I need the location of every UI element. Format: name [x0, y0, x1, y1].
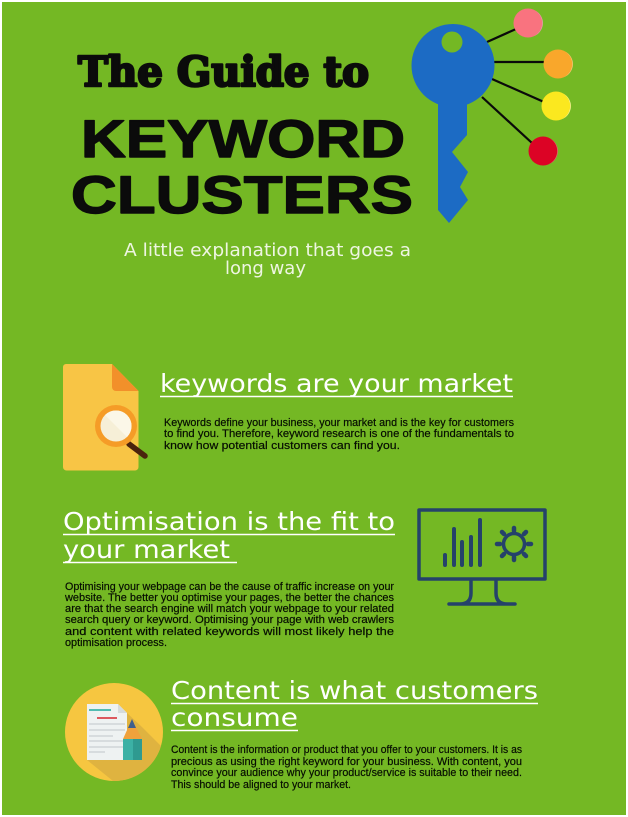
heading: Optimisation is the fit to	[63, 507, 395, 536]
body text: are that the search engine will match your webpage to your related	[65, 603, 394, 615]
body text: Content is the information or product that you offer to your customers. It is as	[171, 744, 522, 756]
panel: keywords are your market	[63, 364, 514, 470]
icon: monitor with chart and gear	[419, 510, 545, 604]
pin: pink	[514, 8, 543, 38]
body text: search query or keyword. Optimising your page with web crawlers	[65, 614, 394, 626]
body text: Keywords define your business, your market and is the key for customers	[164, 417, 514, 429]
body text: optimisation process.	[65, 637, 167, 649]
title line: KEYWORD: KEYWORD	[81, 110, 405, 169]
key hole	[442, 32, 462, 52]
subtitle: long way	[225, 259, 306, 279]
body text: know how potential customers can find you.	[164, 440, 400, 452]
body text: precious as using the right keyword for your business. With content, you	[171, 756, 522, 768]
pin: red	[528, 136, 558, 166]
heading	[63, 507, 395, 564]
body text: and content with related keywords will most likely help the	[65, 626, 394, 638]
pin: orange	[544, 50, 573, 78]
title line: CLUSTERS: CLUSTERS	[71, 166, 413, 225]
subtitle	[124, 241, 411, 279]
pin: yellow	[542, 92, 571, 120]
heading: your market	[63, 535, 230, 564]
body text	[171, 744, 522, 791]
icon: key with coloured pins	[412, 8, 573, 223]
body text	[64, 581, 394, 649]
body text: to find you. Therefore, keyword research is one of the fundamentals to	[164, 428, 514, 440]
heading: consume	[171, 703, 298, 732]
panel: optimisation	[63, 507, 545, 649]
body text: website. The better you optimise your pages, the better the chances	[64, 592, 394, 604]
key shape	[412, 24, 494, 223]
icon: document with magnifier	[63, 364, 145, 470]
pin connector lines	[482, 29, 545, 143]
icon: document and pencil in circle	[65, 683, 163, 781]
heading: keywords are your market	[160, 369, 513, 398]
body text: Optimising your webpage can be the cause of traffic increase on your	[65, 581, 394, 593]
body text: convince your audience why your product/service is suitable to their need.	[171, 767, 522, 779]
panel: content	[65, 676, 538, 791]
title line: The Guide to: The Guide to	[78, 48, 369, 96]
subtitle: A little explanation that goes a	[124, 241, 411, 261]
heading: Content is what customers	[171, 676, 538, 705]
body text: This should be aligned to your market.	[171, 779, 351, 791]
body text	[164, 417, 514, 452]
title	[71, 48, 413, 225]
heading	[171, 676, 538, 732]
